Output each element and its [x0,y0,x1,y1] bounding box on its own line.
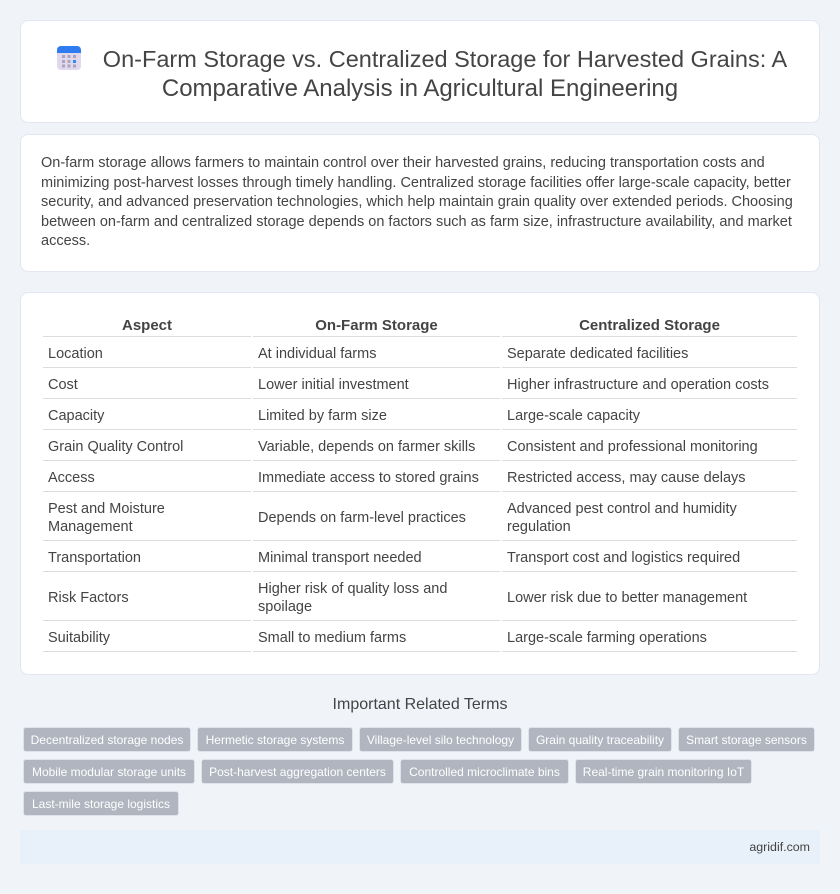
intro text: On-farm storage allows farmers to maintain control over their harvested grains, reducing transportation costs and [41,155,765,171]
comparison table: Capacity [48,408,104,424]
tag: Real-time grain monitoring IoT [583,765,744,779]
comparison table: Centralized Storage [579,317,720,334]
tag: Post-harvest aggregation centers [209,765,386,779]
tag [23,759,195,784]
panel: comparison table [20,292,820,675]
tag: Last-mile storage logistics [32,797,170,811]
comparison table: Small to medium farms [258,630,406,646]
intro text: between on-farm and centralized storage depends on factors such as farm size, infrastructure availability, and market [41,214,792,230]
title block with icon [57,46,788,102]
comparison table: Transportation [48,550,141,566]
tag [23,727,191,752]
comparison table: Management [48,519,133,535]
comparison table: Lower initial investment [258,377,409,393]
heading: On-Farm Storage vs. Centralized Storage for Harvested Grains: A [103,46,787,72]
tag: Village-level silo technology [367,733,514,747]
comparison table: Separate dedicated facilities [507,346,688,362]
comparison table: Risk Factors [48,590,129,606]
tag [678,727,815,752]
tag [528,727,672,752]
comparison table [43,317,797,652]
panel: header card [20,20,820,123]
comparison table: Higher risk of quality loss and [258,581,447,597]
tag [197,727,353,752]
tag: Mobile modular storage units [32,765,186,779]
comparison table: spoilage [258,599,312,615]
comparison table: Depends on farm-level practices [258,510,466,526]
comparison table: regulation [507,519,571,535]
comparison table: Transport cost and logistics required [507,550,740,566]
tag: Hermetic storage systems [206,733,344,747]
intro text [41,155,793,249]
section heading: Important Related Terms [333,696,507,713]
panel: introduction [20,134,820,272]
comparison table: Cost [48,377,78,393]
tag: Grain quality traceability [536,733,664,747]
comparison table: Aspect [122,317,172,334]
comparison table: Suitability [48,630,110,646]
heading [103,46,788,102]
comparison table: Limited by farm size [258,408,387,424]
intro text: security, and advanced preservation technologies, which help maintain grain quality over extended periods. Choosing [41,194,793,210]
comparison table: Minimal transport needed [258,550,422,566]
tag [23,791,179,816]
comparison table: Higher infrastructure and operation costs [507,377,769,393]
comparison table: On-Farm Storage [315,317,438,334]
intro text: access. [41,233,90,249]
tag [201,759,394,784]
tag [575,759,752,784]
footer source: agridif.com [749,840,810,854]
comparison table: Variable, depends on farmer skills [258,439,475,455]
section: important related terms [23,696,815,816]
comparison table: Advanced pest control and humidity [507,501,737,517]
icon: calendar [57,46,81,70]
intro text: minimizing post-harvest losses through timely handling. Centralized storage facilities offer large-scale capacity, better [41,174,791,190]
tag: Decentralized storage nodes [31,733,183,747]
comparison table: Restricted access, may cause delays [507,470,746,486]
comparison table: Large-scale capacity [507,408,640,424]
heading: Comparative Analysis in Agricultural Engineering [162,74,678,102]
comparison table: Lower risk due to better management [507,590,747,606]
comparison table: Large-scale farming operations [507,630,707,646]
comparison table: Location [48,346,103,362]
comparison table: Pest and Moisture [48,501,165,517]
comparison table: Consistent and professional monitoring [507,439,758,455]
tag [400,759,569,784]
tag: Controlled microclimate bins [409,765,560,779]
comparison table: Immediate access to stored grains [258,470,479,486]
tag [359,727,522,752]
comparison table: Access [48,470,95,486]
footer bar [20,830,820,864]
tag: Smart storage sensors [686,733,807,747]
comparison table: Grain Quality Control [48,439,183,455]
comparison table: At individual farms [258,346,376,362]
